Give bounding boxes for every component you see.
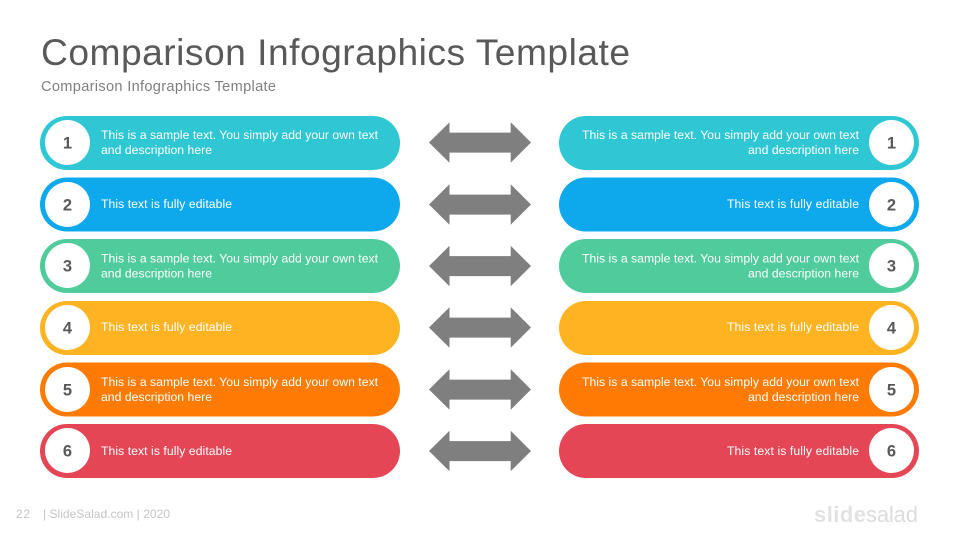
left pill 2: This text is fully editable [101, 197, 232, 211]
left pill 3: This is a sample text. You simply add your own text [101, 252, 379, 266]
left pill 4: This text is fully editable [101, 320, 232, 334]
left pill 1 [40, 116, 400, 170]
right pill 1: 1 [887, 134, 896, 152]
right pill 3: and description here [748, 266, 859, 280]
left pill 4 [40, 301, 400, 355]
left pill 1: 1 [63, 134, 72, 152]
logo wordmark: salad [866, 502, 918, 527]
left pill 6: 6 [63, 442, 72, 460]
arrow 2 [429, 184, 531, 225]
arrow 4 [429, 307, 531, 348]
arrow 5 [429, 369, 531, 410]
right pill 4: 4 [887, 320, 897, 338]
left pill 6: This text is fully editable [101, 444, 232, 458]
left pill 2: 2 [63, 196, 72, 214]
right pill 2: 2 [887, 196, 896, 214]
left pill 5: This is a sample text. You simply add your own text [101, 375, 379, 389]
arrow 6 [429, 431, 531, 471]
left pill 3 [40, 239, 400, 293]
left pill 5 [40, 362, 400, 416]
right pill 3: 3 [887, 258, 896, 276]
footer text: | SlideSalad.com | 2020 [43, 507, 170, 521]
left pill 1: This is a sample text. You simply add your own text [101, 128, 379, 142]
left pill 2 [40, 178, 400, 232]
right pill 6: 6 [887, 442, 896, 460]
right pill 2: This text is fully editable [727, 197, 859, 211]
right pill 4 [559, 301, 919, 355]
right pill 6 [559, 424, 919, 478]
left pill 3: and description here [101, 266, 212, 280]
right pill 6: This text is fully editable [727, 444, 859, 458]
arrow 3 [429, 246, 531, 286]
arrow 1 [429, 122, 531, 163]
right pill 3 [559, 239, 919, 293]
right pill 1: This is a sample text. You simply add your own text [582, 128, 860, 142]
left pill 5: and description here [101, 390, 212, 404]
right pill 5: This is a sample text. You simply add your own text [582, 375, 860, 389]
left pill 3: 3 [63, 258, 72, 276]
subtitle: Comparison Infographics Template [41, 79, 276, 95]
left pill 6 [40, 424, 400, 478]
title: Comparison Infographics Template [41, 31, 630, 73]
right pill 1: and description here [748, 143, 859, 157]
logo wordmark: slide [814, 502, 866, 527]
left pill 4: 4 [63, 320, 73, 338]
left pill 1: and description here [101, 143, 212, 157]
right pill 4: This text is fully editable [727, 320, 859, 334]
right pill 1 [559, 116, 919, 170]
right pill 5: and description here [748, 390, 859, 404]
right pill 2 [559, 178, 919, 232]
right pill 5 [559, 362, 919, 416]
page number: 22 [16, 507, 30, 521]
left pill 5: 5 [63, 382, 72, 400]
right pill 3: This is a sample text. You simply add your own text [582, 252, 860, 266]
logo wordmark [814, 502, 918, 527]
right pill 5: 5 [887, 382, 896, 400]
